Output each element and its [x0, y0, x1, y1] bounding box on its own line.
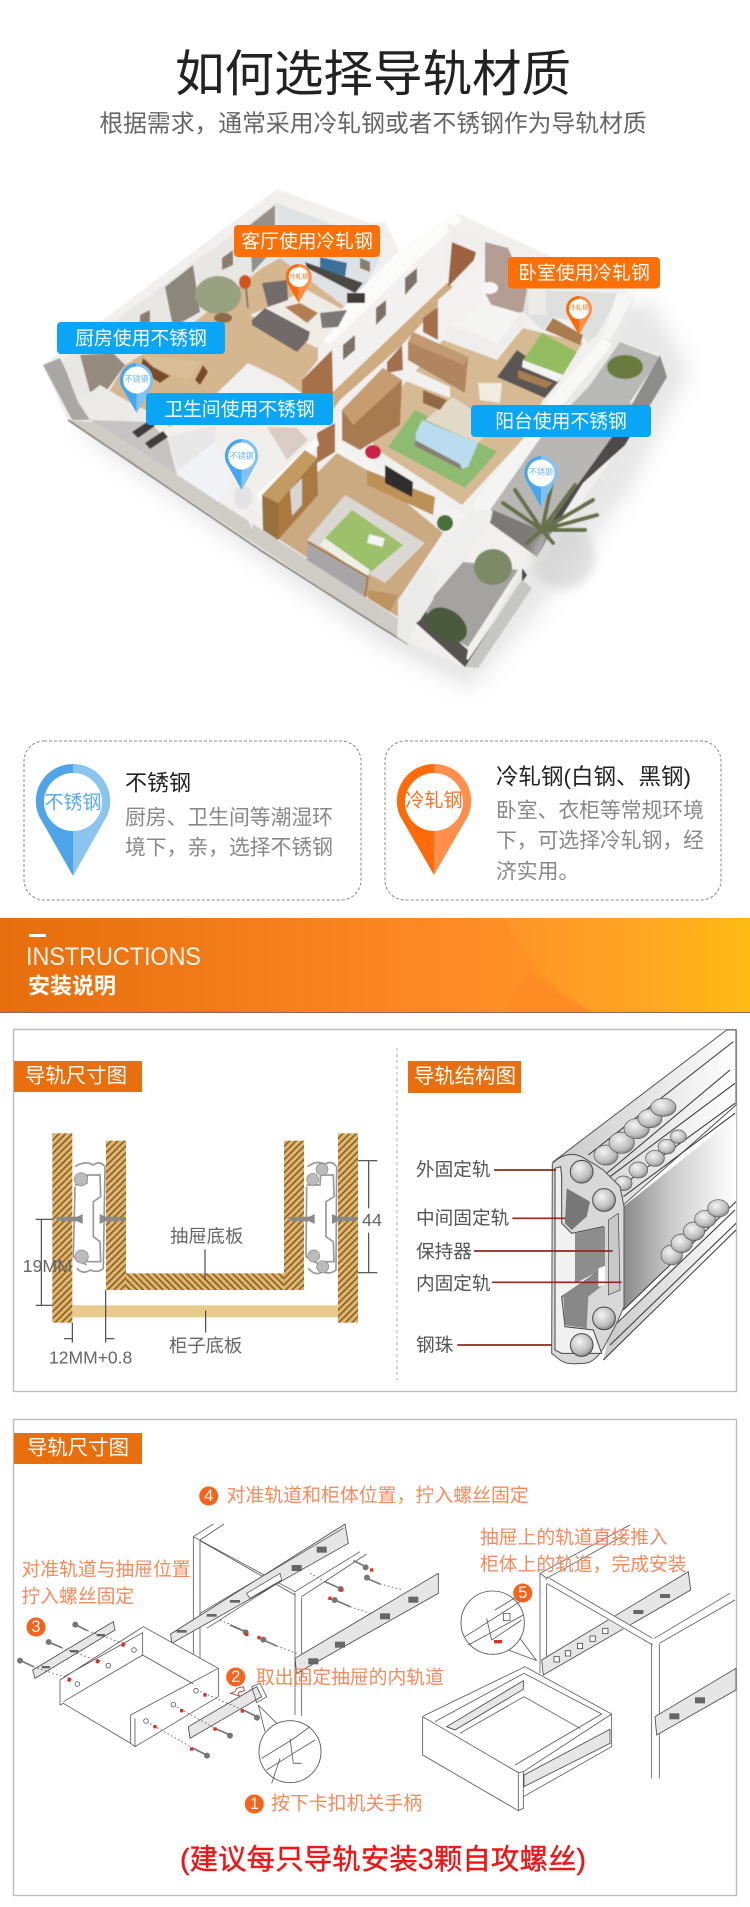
badge 5: 5 [518, 1584, 527, 1602]
basin [480, 282, 498, 294]
blue bed [415, 420, 478, 469]
step text 3 [22, 1558, 191, 1606]
panel doors [423, 307, 438, 340]
label: bathroom [146, 393, 333, 425]
sofa [252, 308, 310, 352]
screws [21, 1561, 380, 1755]
icon: orange pin [397, 764, 471, 875]
cabinet left wall [52, 1133, 72, 1323]
screws [57, 1214, 357, 1224]
bathtub [178, 442, 232, 502]
dimension lines [36, 1161, 377, 1343]
green rug main [388, 410, 497, 488]
part labels [416, 1159, 510, 1355]
tv stand [367, 470, 435, 515]
card description: 厨房、卫生间等潮湿环 [125, 806, 333, 830]
wall frames [343, 268, 417, 360]
rear wardrobe [408, 332, 468, 393]
glass door two [250, 205, 275, 273]
badge 2: 2 [231, 1668, 240, 1686]
card description: 济实用。 [496, 860, 579, 884]
grey wall bottom [397, 563, 438, 644]
title: 如何选择导轨材质 [175, 47, 571, 102]
kitchen glass door [80, 353, 125, 393]
armchair [478, 383, 502, 403]
pin: living room: 冷轧钢 [289, 272, 309, 280]
holes [75, 1648, 198, 1723]
armchair one [262, 280, 288, 307]
living rug [250, 290, 347, 348]
card heading: 不锈钢 [125, 770, 191, 796]
screw heads [17, 1564, 370, 1759]
step text 5: 柜体上的轨道，完成安装 [480, 1554, 687, 1574]
icon: blue pin: 不锈钢 [44, 792, 102, 814]
label: bedroom [508, 257, 660, 288]
right lower rail [655, 1668, 736, 1735]
dining table [143, 355, 202, 380]
palm plant [503, 478, 597, 543]
card frame [385, 741, 721, 900]
bottom bed front [307, 542, 368, 597]
leader lines [457, 1170, 622, 1345]
label: balcony [471, 405, 651, 437]
subtitle: 根据需求，通常采用冷轧钢或者不锈钢作为导轨材质 [99, 110, 647, 138]
main wardrobe [342, 368, 402, 450]
bedroom door [448, 242, 476, 287]
pin: living room [286, 264, 312, 303]
divider [396, 1048, 398, 1380]
flowers [607, 355, 643, 379]
plant small [437, 515, 453, 531]
chart: rail dimension diagram [23, 1133, 382, 1367]
plant [195, 276, 241, 314]
low white wall [403, 365, 450, 398]
shelf [528, 290, 546, 315]
drawer walls [106, 1141, 304, 1290]
rail inner panel [623, 1117, 736, 1310]
lower left rail [295, 1573, 438, 1673]
chairs [140, 358, 208, 385]
part labels: 内固定轨 [416, 1273, 491, 1294]
upper bench [518, 370, 553, 388]
icon: orange pin: 冷轧钢 [405, 790, 463, 812]
card description: 境下，亲，选择不锈钢 [125, 836, 333, 860]
shower floor [457, 303, 520, 343]
bath tile floor [215, 425, 317, 530]
cabinet floor [72, 1305, 338, 1317]
apartment model [43, 189, 690, 690]
rear wall white [447, 223, 530, 290]
corridor floor [333, 283, 453, 410]
bedroom rear wall [523, 290, 620, 343]
icon: blue pin [36, 764, 110, 876]
low wall [337, 440, 465, 525]
floor plan illustration [43, 189, 690, 690]
card frame [24, 741, 361, 900]
pin: kitchen: 不锈钢 [125, 374, 149, 384]
flowers main [365, 445, 381, 459]
instructions banner [0, 918, 750, 1013]
base silhouette [43, 189, 665, 667]
tab: structure [408, 1061, 521, 1093]
right cabinet frame [423, 1525, 736, 1811]
step text 5: 抽屉上的轨道直接推入 [480, 1526, 668, 1548]
step text 3: 对准轨道与抽屉位置 [22, 1558, 191, 1580]
armchair two [320, 310, 347, 328]
tab: structure: 导轨结构图 [414, 1065, 516, 1088]
card description [125, 806, 333, 860]
coffee table [285, 303, 318, 323]
label: drawer bottom: 抽屉底板 [170, 1225, 243, 1246]
banner chinese heading: 安装说明 [28, 974, 116, 998]
label: living room: 客厅使用冷轧钢 [241, 230, 373, 252]
step text 5 [480, 1526, 687, 1574]
small rail step 2 [188, 1683, 267, 1738]
rail groove lines [588, 1042, 735, 1197]
left cabinet frame [193, 1524, 367, 1716]
panel: rail diagrams [14, 1030, 736, 1392]
upper bed stripe [522, 360, 563, 382]
wall top strip [316, 212, 462, 345]
panel: stainless steel card [24, 741, 361, 900]
blue bed base [415, 440, 462, 470]
label: bathroom: 卫生间使用不锈钢 [164, 398, 315, 420]
bottom bedroom floor [265, 453, 443, 617]
banner circle [505, 918, 750, 1012]
nightstand main [423, 390, 447, 410]
rail top band [553, 1030, 736, 1205]
step text 3: 拧入螺丝固定 [22, 1586, 134, 1606]
small rail step 3 [33, 1622, 115, 1678]
drawer installed [423, 1667, 612, 1811]
bottom balcony plant [474, 549, 512, 585]
label: 12MM+0.8: 12MM+0.8 [49, 1347, 132, 1367]
ball row lower [661, 1200, 729, 1265]
door lower [302, 350, 333, 420]
label: cabinet bottom: 柜子底板 [169, 1335, 242, 1356]
badge 1 [245, 1794, 264, 1814]
panel border [14, 1420, 736, 1896]
right wall top [547, 295, 635, 408]
main wood floor [373, 328, 583, 505]
bath tile panel [267, 427, 308, 460]
bath partition white [438, 257, 487, 340]
dashed guides [33, 1573, 403, 1748]
detail circle step 5 [461, 1591, 537, 1661]
ball row middle [615, 1130, 686, 1191]
part labels: 外固定轨 [416, 1159, 491, 1180]
cabinet right wall [338, 1133, 358, 1323]
part labels: 钢珠 [416, 1334, 454, 1355]
bottom door [317, 423, 335, 463]
tab: dimension [14, 1061, 142, 1092]
middle balcony rail [537, 405, 640, 557]
picture frames [140, 250, 370, 325]
installation drawing [17, 1524, 736, 1811]
tv unit [305, 262, 363, 293]
drawer rails [447, 1681, 610, 1787]
corner plant [420, 600, 474, 650]
detail circle step 1 [258, 1705, 321, 1783]
card description: 卧室、衣柜等常规环境 [496, 800, 704, 822]
label: kitchen: 厨房使用不锈钢 [75, 328, 207, 348]
floor shadow [75, 300, 690, 690]
tab: steps [14, 1433, 142, 1464]
glass door one [165, 265, 200, 327]
banner wedge [507, 972, 593, 1012]
red recommendation: (建议每只导轨安装3颗自攻螺丝) [180, 1844, 586, 1876]
pin: balcony: 不锈钢 [529, 466, 553, 476]
bottom balcony shadow [465, 580, 532, 668]
steel balls [570, 1160, 615, 1356]
label: kitchen [57, 322, 225, 354]
rail bottom band [603, 1200, 736, 1360]
balcony wall white strips [475, 408, 560, 512]
red markers [67, 1568, 373, 1751]
left arrow [231, 1687, 244, 1696]
ball row top [594, 1098, 676, 1165]
badge 3 [26, 1618, 46, 1636]
step text 4: 对准轨道和柜体位置，拧入螺丝固定 [226, 1484, 529, 1506]
upper balcony floor [573, 342, 660, 405]
label: balcony: 阳台使用不锈钢 [495, 410, 627, 432]
upper left back wall [62, 203, 277, 405]
bath partition wall [256, 437, 319, 503]
pin: bedroom [566, 296, 592, 335]
bottom wardrobe [278, 458, 318, 540]
headboard [545, 318, 583, 345]
diagonal beam over rail [547, 1577, 653, 1645]
label: 19MM: 19MM [23, 1256, 72, 1276]
badge 2 [226, 1668, 245, 1686]
badge 4 [199, 1486, 218, 1506]
panel: cold rolled steel card [385, 741, 721, 900]
middle balcony floor [490, 403, 632, 540]
lamp [239, 275, 251, 308]
bottom rug [307, 495, 425, 583]
panel border [14, 1030, 736, 1392]
step text 2: 取出固定抽屉的内轨道 [256, 1666, 444, 1688]
tile wall [485, 242, 527, 315]
kitchen counter top [78, 385, 160, 422]
upper balcony rail [620, 355, 667, 430]
palm shadow [531, 525, 595, 589]
card description: 下，可选择冷轧钢，经 [496, 830, 704, 852]
panel: installation steps [14, 1420, 736, 1896]
tv screen [320, 257, 347, 277]
badge 5 [513, 1584, 532, 1602]
part labels: 保持器 [416, 1241, 472, 1262]
stove [132, 420, 168, 449]
kitchen counter front [90, 420, 177, 475]
card heading: 冷轧钢(白钢、黑钢) [496, 764, 691, 790]
right rail [306, 1162, 337, 1274]
bottom balcony rim [416, 568, 527, 667]
upper left rail [171, 1524, 348, 1643]
badge 4: 4 [204, 1487, 213, 1505]
drawer bottom [126, 1273, 284, 1290]
upper bed [523, 333, 577, 375]
step text 1: 按下卡扣机关手柄 [271, 1792, 422, 1814]
bottom planter [416, 607, 468, 667]
shower low wall [445, 313, 522, 360]
pin: bathroom [225, 439, 258, 490]
badge 3: 3 [31, 1618, 41, 1636]
badge 1: 1 [250, 1795, 259, 1813]
pin: bedroom: 冷轧钢 [569, 302, 589, 312]
part labels: 中间固定轨 [416, 1207, 510, 1228]
toilet [234, 485, 252, 509]
pin: balcony [524, 456, 558, 507]
right top rail [542, 1572, 691, 1675]
living room floor [108, 258, 352, 427]
banner english heading: INSTRUCTIONS [26, 943, 201, 971]
bottom bed [325, 510, 403, 577]
dark rug upper [497, 350, 560, 398]
cross section dark cells [565, 1188, 590, 1230]
living corridor wall [318, 212, 455, 392]
exterior bottom strip [68, 420, 408, 644]
bottom balcony floor [420, 562, 518, 647]
card description [496, 800, 704, 884]
bed head [425, 397, 495, 443]
pin: kitchen [120, 363, 153, 413]
label: 44: 44 [362, 1210, 382, 1230]
tab: dimension: 导轨尺寸图 [25, 1064, 127, 1088]
pin: bathroom: 不锈钢 [230, 450, 254, 460]
label: living room [234, 225, 380, 257]
left wall end [43, 358, 90, 420]
drawer body [60, 1627, 218, 1747]
upper back wall right [277, 203, 380, 312]
book [367, 534, 385, 547]
tab: steps: 导轨尺寸图 [27, 1436, 129, 1460]
bath left wall [168, 425, 217, 470]
label: bedroom: 卧室使用冷轧钢 [518, 262, 650, 283]
banner background [0, 918, 750, 1012]
middle planter front [490, 510, 547, 557]
bottom nightstand [368, 590, 398, 612]
speakers [347, 293, 365, 303]
left rail [73, 1163, 105, 1272]
chart: rail structure diagram [416, 1030, 736, 1364]
rail cross section [552, 1154, 624, 1364]
